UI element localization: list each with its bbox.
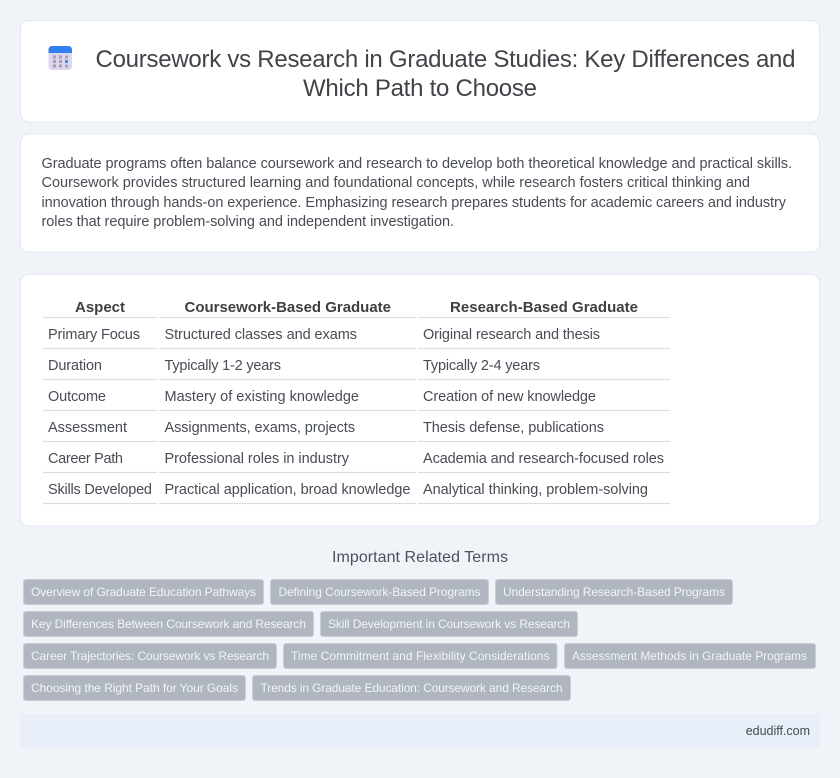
table row: career path: Professional roles in industry — [164, 451, 350, 467]
icon: calendar — [48, 46, 72, 70]
heading: important related terms: Important Related Terms — [332, 549, 508, 566]
table row: outcome — [48, 389, 596, 405]
tag: career trajectories — [24, 644, 276, 668]
table header: Coursework-Based Graduate — [184, 299, 391, 316]
tag: choosing path — [24, 676, 246, 700]
tag: assessment methods — [564, 644, 816, 668]
table row: outcome: Creation of new knowledge — [423, 389, 596, 405]
title — [96, 46, 796, 102]
tag: research programs — [496, 580, 732, 604]
tag: assessment methods: Assessment Methods in Graduate Programs — [572, 649, 807, 663]
tag: time commitment — [284, 644, 557, 668]
table row: duration: Duration — [48, 358, 102, 374]
title: Which Path to Choose — [303, 75, 537, 102]
table row: career path — [48, 451, 664, 467]
tag: coursework programs — [270, 580, 488, 604]
tag: key differences — [24, 612, 314, 636]
panel: introduction — [20, 134, 820, 252]
table row: skills developed: Analytical thinking, problem-solving — [423, 482, 648, 498]
table row: duration: Typically 1-2 years — [164, 358, 281, 374]
table row: primary focus: Structured classes and exams — [164, 327, 357, 343]
tag: trends — [252, 676, 570, 700]
tag: research programs: Understanding Research-Based Programs — [503, 585, 725, 599]
table row: primary focus: Primary Focus — [48, 327, 140, 343]
table header: Aspect — [75, 299, 125, 316]
table row: primary focus — [48, 327, 600, 343]
table row: outcome: Outcome — [48, 389, 106, 405]
table row: skills developed: Skills Developed — [48, 482, 152, 498]
table row: career path: Career Path — [48, 451, 123, 467]
table row: assessment: Assessment — [48, 420, 127, 436]
table row: primary focus: Original research and thesis — [423, 327, 600, 343]
table row: duration — [48, 358, 540, 374]
footer — [20, 714, 820, 748]
text block: introduction paragraph: Graduate programs often balance coursework and research to develop both theoretical knowledge and practical skills. — [42, 156, 792, 172]
table header — [75, 299, 638, 316]
text block: introduction paragraph — [42, 156, 792, 230]
table row: skills developed: Practical application, broad knowledge — [164, 482, 410, 498]
tag: coursework programs: Defining Coursework-Based Programs — [278, 585, 480, 599]
tag: choosing path: Choosing the Right Path for Your Goals — [31, 681, 238, 695]
tag: overview — [24, 580, 264, 604]
tag: overview: Overview of Graduate Education Pathways — [31, 585, 256, 599]
text block: introduction paragraph: Coursework provides structured learning and foundational concepts, while research fosters critical thinking and — [42, 175, 750, 191]
title: Coursework vs Research in Graduate Studies: Key Differences and — [96, 46, 796, 73]
tag: skill development: Skill Development in Coursework vs Research — [328, 617, 570, 631]
table row: duration: Typically 2-4 years — [423, 358, 540, 374]
tag: skill development — [320, 612, 578, 636]
tag list: related terms — [24, 580, 816, 700]
tag: career trajectories: Career Trajectories: Coursework vs Research — [31, 649, 269, 663]
table header: Research-Based Graduate — [450, 299, 638, 316]
table row: skills developed — [48, 482, 648, 498]
panel: comparison table — [20, 274, 820, 526]
text block: introduction paragraph: roles that require problem-solving and independent investigation. — [42, 214, 454, 230]
tag: time commitment: Time Commitment and Flexibility Considerations — [291, 649, 550, 663]
table row: assessment — [48, 420, 604, 436]
table row: assessment: Assignments, exams, projects — [164, 420, 355, 436]
table row: career path: Academia and research-focused roles — [423, 451, 664, 467]
table row: assessment: Thesis defense, publications — [423, 420, 604, 436]
panel: title card — [20, 20, 820, 122]
text block: introduction paragraph: innovation through hands-on experience. Emphasizing research prepares students for academic careers and industry — [42, 195, 787, 211]
tag: key differences: Key Differences Between Coursework and Research — [31, 617, 306, 631]
table row: outcome: Mastery of existing knowledge — [164, 389, 359, 405]
footer: edudiff.com — [746, 724, 810, 738]
tag: trends: Trends in Graduate Education: Coursework and Research — [260, 681, 562, 695]
